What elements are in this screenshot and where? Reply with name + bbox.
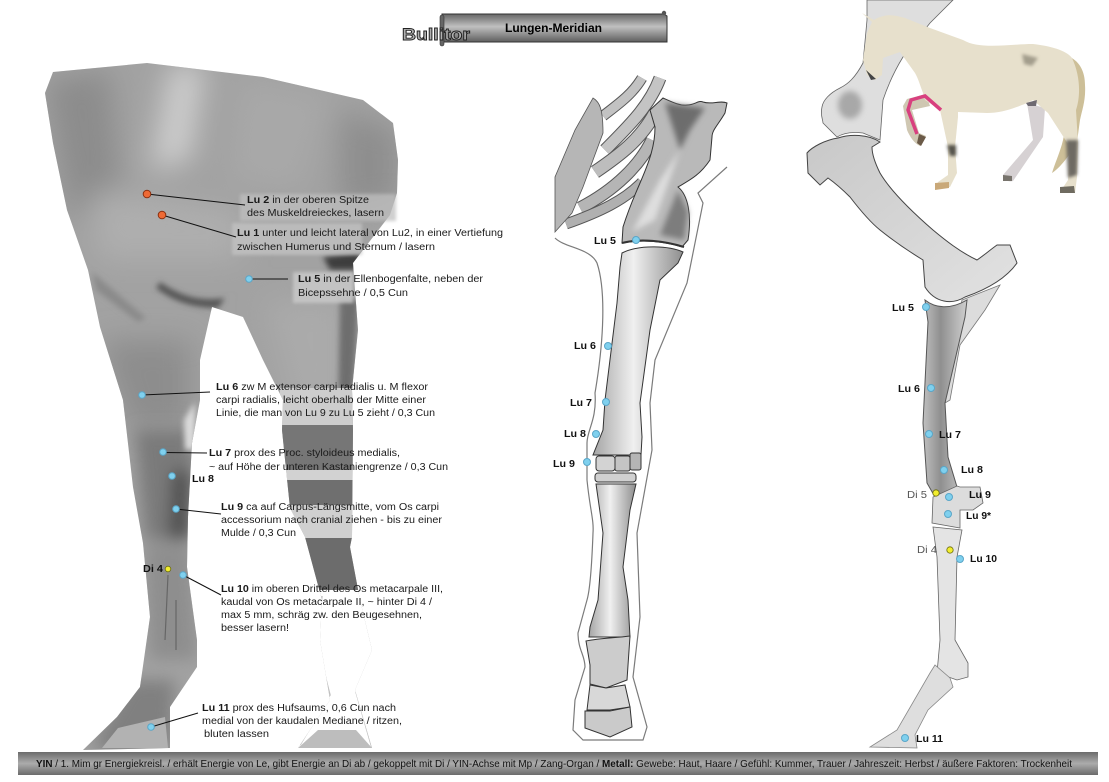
photo: horse chest and forelegs xyxy=(30,55,410,760)
text: Lu 2: Lu 2 in der oberen Spitze xyxy=(247,195,369,206)
logo: Bullitor: Bullitor xyxy=(402,25,470,44)
banner roller xyxy=(440,15,444,46)
text: Lu 1 xyxy=(237,228,503,253)
ulna xyxy=(945,285,1000,403)
point labels: Lu 9 xyxy=(553,459,575,470)
label: Lu 8: Lu 8 xyxy=(192,474,214,485)
text: Lu 1: Lu 1 unter und leicht lateral von Lu2, in einer Vertiefung xyxy=(237,228,503,239)
humerus xyxy=(807,135,1017,302)
text: Lu 7 xyxy=(209,448,448,473)
text: Lu 9: Mulde / 0,3 Cun xyxy=(221,528,296,539)
panel: front-view skeleton of the foreleg xyxy=(553,78,727,740)
text: Lu 6: carpi radialis, leicht oberhalb der Mitte einer xyxy=(216,395,427,406)
point labels: Di 5 xyxy=(907,490,927,501)
pastern and hoof bones xyxy=(870,665,953,748)
text: Lu 5 xyxy=(298,274,484,299)
banner knob xyxy=(662,11,666,15)
point labels: Di 4 xyxy=(917,545,937,556)
point labels: Lu 9* xyxy=(966,511,991,522)
sternum / scapula fragment xyxy=(555,98,603,232)
raised foreleg xyxy=(903,94,930,146)
text: Lu 10: besser lasern! xyxy=(221,623,289,634)
illustration: white horse with meridian marked in pink xyxy=(862,13,1085,193)
leader lines xyxy=(142,194,288,727)
text band backgrounds xyxy=(232,194,396,303)
text: Lu 11: bluten lassen xyxy=(204,729,269,740)
fetlock and phalanges xyxy=(585,636,632,737)
scapula xyxy=(821,0,953,140)
text: Lu 6: Lu 6 zw M extensor carpi radialis u. M flexor xyxy=(216,382,429,393)
point labels xyxy=(553,236,616,470)
acupoints xyxy=(902,304,964,742)
label: Di 4: Di 4 xyxy=(143,564,163,575)
text: Lu 2 xyxy=(247,195,384,219)
text: Lu 10: kaudal von Os metacarpale II, ~ hinter Di 4 / xyxy=(221,597,432,608)
text: Lu 6: Linie, die man von Lu 9 zu Lu 5 zieht / 0,3 Cun xyxy=(216,408,435,419)
point labels: Lu 9 xyxy=(969,490,991,501)
cannon and fetlock xyxy=(933,527,968,680)
humerus xyxy=(622,98,727,247)
point labels: Lu 8 xyxy=(564,429,586,440)
text: Lu 7: ~ auf Höhe der unteren Kastaniengrenze / 0,3 Cun xyxy=(209,462,448,473)
acupoints xyxy=(584,236,640,466)
skin outline xyxy=(555,167,727,740)
text: Lu 10: max 5 mm, schräg zw. den Beugesehnen, xyxy=(221,610,422,621)
point labels: Lu 6 xyxy=(898,384,920,395)
horse shading xyxy=(866,54,1078,193)
scapula shadow xyxy=(838,91,862,119)
point labels: Lu 7 xyxy=(570,398,592,409)
text: Lu 11: medial von der kaudalen Mediane / ritzen, xyxy=(202,716,402,727)
point labels: Lu 6 xyxy=(574,341,596,352)
heading: Lungen-Meridian xyxy=(505,23,602,35)
humerus lower joint line xyxy=(622,240,684,247)
text: Lu 9 xyxy=(221,502,443,539)
text: Lu 9: accessorium nach cranial ziehen - bis zu einer xyxy=(221,515,443,526)
point labels: Lu 11 xyxy=(916,734,943,745)
panel: side-view skeleton of the foreleg xyxy=(807,0,1017,748)
acupoints on the photo xyxy=(139,190,252,730)
title banner xyxy=(402,11,667,46)
horse body xyxy=(862,13,1079,193)
tail xyxy=(1052,57,1085,173)
text: Lu 6 xyxy=(216,382,435,419)
carpus xyxy=(932,486,983,528)
text: Lu 11 xyxy=(202,703,402,740)
far hind leg xyxy=(1003,103,1045,181)
carpus xyxy=(595,453,641,482)
cannon bone xyxy=(589,484,636,637)
point labels: Lu 5 xyxy=(594,236,616,247)
point labels: Lu 7 xyxy=(939,430,961,441)
text: Lu 7: Lu 7 prox des Proc. styloideus medialis, xyxy=(209,448,400,459)
point labels: Lu 8 xyxy=(961,465,983,476)
humerus shading xyxy=(632,103,705,240)
ribs xyxy=(566,78,660,224)
text: Lu 10: Lu 10 im oberen Drittel des Os metacarpale III, xyxy=(221,584,443,595)
footer bar xyxy=(18,752,1098,775)
text: Lu 1: zwischen Humerus und Sternum / lasern xyxy=(237,242,435,253)
text: Lu 5: Lu 5 in der Ellenbogenfalte, neben der xyxy=(298,274,484,285)
text: Lu 9: Lu 9 ca auf Carpus-Längsmitte, vom Os carpi xyxy=(221,502,439,513)
point labels: Lu 5 xyxy=(892,303,914,314)
text: Lu 11: Lu 11 prox des Hufsaums, 0,6 Cun nach xyxy=(202,703,396,714)
text: Lu 5: Bicepssehne / 0,5 Cun xyxy=(298,288,408,299)
footer text: YIN / 1. Mim gr Energiekreisl. / erhält Energie von Le, gibt Energie an Di ab / gekoppelt mit Di / YIN-Achse mit Mp / Zang-Organ / Metall: Gewebe: Haut, Haare / Gefühl: Kummer, Trauer / Jahreszeit: Herbst / äußere Faktoren: Trockenheit xyxy=(36,758,1072,770)
point labels xyxy=(892,303,997,745)
panel: horse photo with acupuncture points xyxy=(30,55,503,760)
text: Lu 10 xyxy=(221,584,443,634)
text: Lu 2: des Muskeldreieckes, lasern xyxy=(247,208,384,219)
point labels: Lu 10 xyxy=(970,554,997,565)
radius xyxy=(923,300,967,497)
banner scroll xyxy=(442,14,667,42)
radius xyxy=(593,247,683,455)
meridian line xyxy=(908,96,941,134)
